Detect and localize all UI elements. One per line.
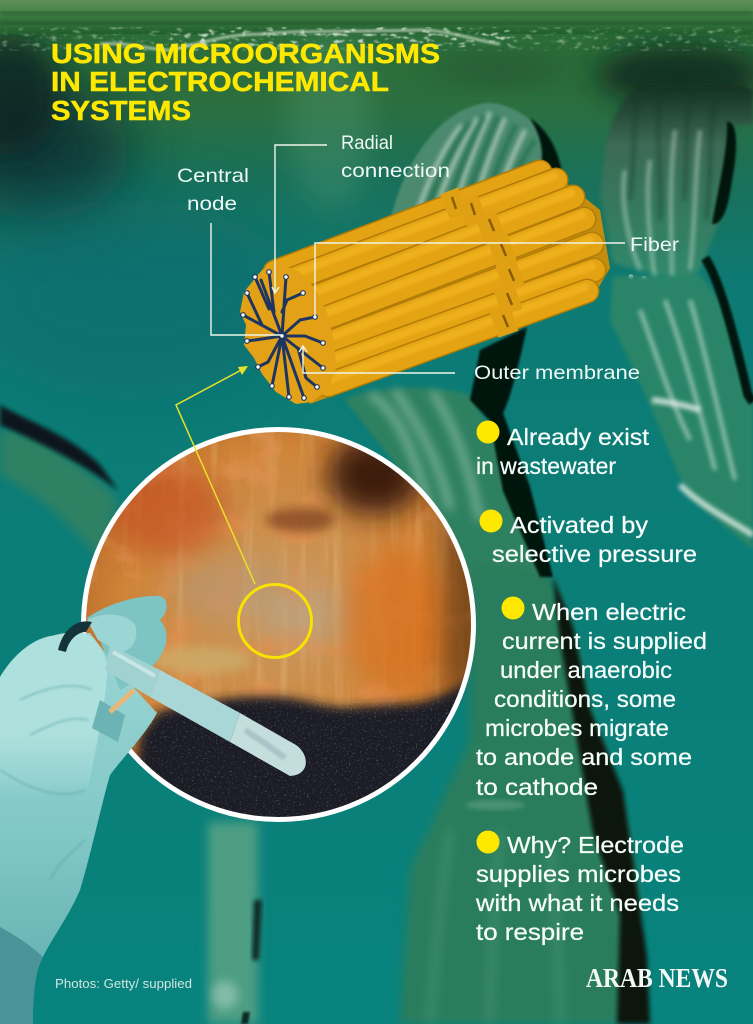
gloved hand holding tube — [0, 596, 306, 1024]
bottom kelp — [208, 822, 262, 1024]
bullet: activated — [480, 510, 697, 567]
fibers — [275, 172, 594, 385]
upper fingers — [87, 596, 167, 690]
bullet: activated: Activated by — [510, 512, 649, 538]
bullet: electric current: under anaerobic — [500, 657, 672, 683]
labels: node — [187, 193, 237, 215]
bullet: electric current: current is supplied — [502, 628, 707, 654]
bullet: already exist: in wastewater — [476, 453, 616, 479]
title: USING MICROORGANISMS — [51, 38, 440, 69]
bullet: why: Why? Electrode — [507, 832, 684, 858]
right lower kelp — [610, 258, 753, 550]
right upper kelp — [600, 85, 753, 283]
bundle body — [264, 162, 610, 404]
bullet: electric current: to cathode — [476, 774, 598, 800]
bullet: why: to respire — [476, 919, 584, 945]
bullet: already exist — [476, 420, 650, 479]
photo credit: Photos: Getty/ supplied — [55, 976, 192, 991]
spokes: radial connections — [243, 272, 323, 398]
fiber joints — [445, 197, 520, 327]
title: SYSTEMS — [51, 95, 191, 126]
bullet: already exist: Already exist — [507, 424, 650, 450]
central lower kelp — [345, 388, 640, 1024]
bullet: electric current — [476, 596, 707, 800]
labels: Fiber — [630, 234, 680, 256]
black kelp shadows — [470, 327, 650, 1024]
bullet: electric current: conditions, some — [494, 686, 676, 712]
front face — [240, 262, 336, 404]
microscope sample circle — [80, 425, 490, 830]
index finger — [0, 632, 107, 800]
leader lines — [211, 145, 625, 373]
bullet: why — [475, 830, 684, 945]
title: IN ELECTROCHEMICAL — [51, 66, 389, 97]
sample tube — [105, 645, 306, 776]
bullet: electric current: to anode and some — [476, 744, 692, 770]
bullet: electric current: When electric — [532, 599, 686, 625]
bullet: why: supplies microbes — [476, 861, 681, 887]
labels — [177, 132, 680, 384]
yellow highlight circle and arrow — [176, 366, 312, 658]
cylindrical electrode bundle — [240, 162, 610, 404]
labels: Outer membrane — [474, 362, 640, 384]
labels: connection — [341, 160, 450, 182]
dome kelp — [380, 103, 562, 340]
water surface and foam — [0, 0, 753, 51]
labels: Radial — [341, 132, 393, 154]
labels: Central — [177, 165, 249, 187]
palm and lower fingers — [0, 633, 157, 1024]
logo: Arab News: ARAB NEWS — [586, 963, 728, 993]
cuff — [0, 927, 43, 1024]
title — [51, 38, 440, 126]
fiber tips — [241, 270, 325, 400]
bullet: activated: selective pressure — [492, 541, 697, 567]
bullet: electric current: microbes migrate — [485, 715, 669, 741]
bullet: why: with what it needs — [475, 890, 679, 916]
left kelp — [0, 405, 118, 560]
